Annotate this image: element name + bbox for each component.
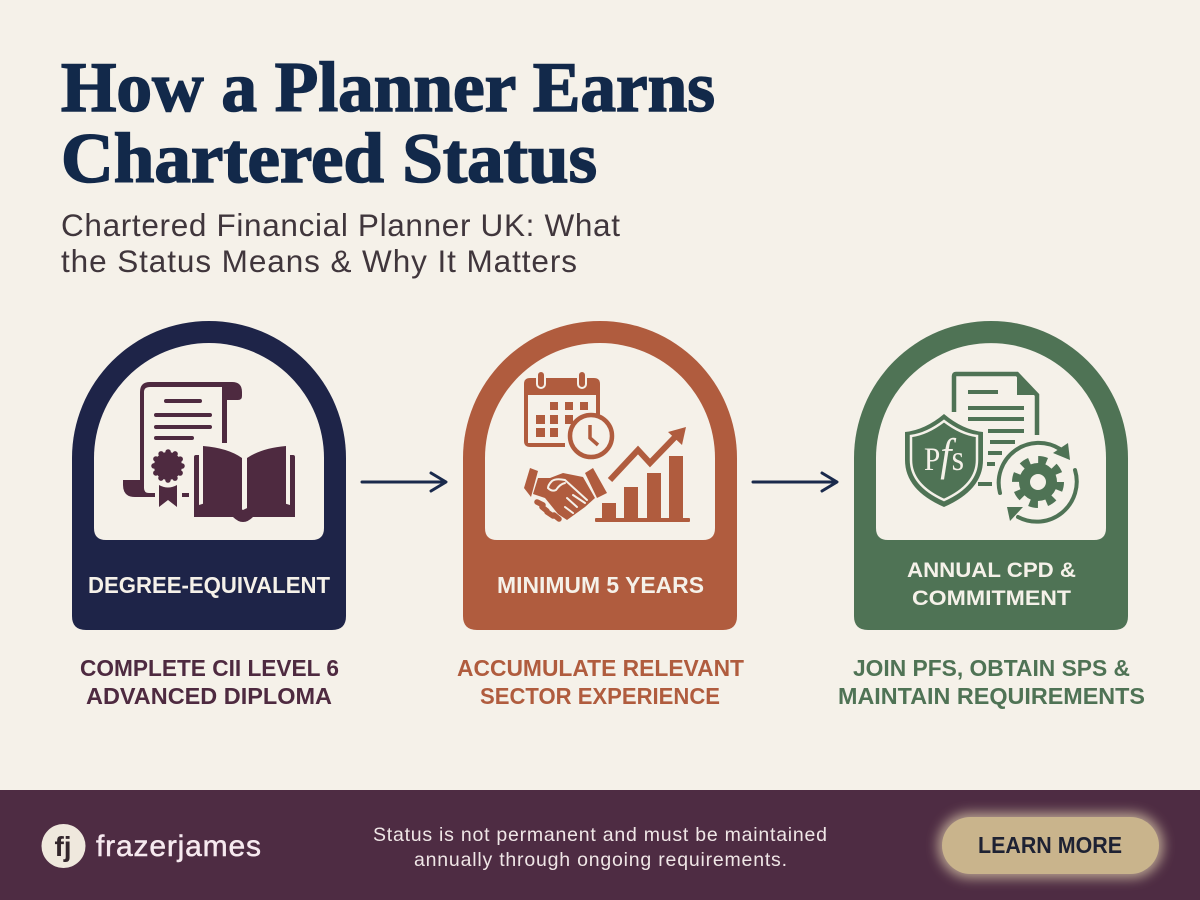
arch badge navy <box>72 321 346 630</box>
caption: step 1 <box>80 655 339 709</box>
caption: step 1: ADVANCED DIPLOMA <box>86 683 332 709</box>
arrow: step 1 to step 2 <box>362 473 446 491</box>
arch window <box>94 343 324 540</box>
footer note <box>373 824 827 871</box>
logo badge <box>42 824 86 868</box>
subtitle: the Status Means & Why It Matters <box>61 243 577 279</box>
badge label: COMMITMENT <box>912 586 1071 610</box>
arch badge green <box>854 321 1128 630</box>
logo monogram: fj <box>54 831 72 862</box>
subtitle: Chartered Financial Planner UK: What <box>61 207 620 243</box>
icon: PFS shield, document and renewal gear <box>905 374 1077 522</box>
caption: step 2 <box>457 655 744 709</box>
icon: PFS shield, document and renewal gear: Pfs <box>924 429 964 480</box>
badge label <box>907 558 1076 610</box>
footer note: Status is not permanent and must be maintained <box>373 824 827 846</box>
logo <box>42 824 261 868</box>
button: learn more <box>938 813 1163 878</box>
panel: step 2 minimum 5 years <box>463 321 737 630</box>
logo wordmark: frazerjames <box>96 830 261 863</box>
caption: step 3 <box>838 655 1145 709</box>
title <box>61 49 715 198</box>
button: learn more: LEARN MORE <box>978 832 1122 858</box>
arch window <box>876 343 1106 540</box>
panel: step 1 degree-equivalent <box>72 321 346 630</box>
caption: step 2: SECTOR EXPERIENCE <box>480 683 720 709</box>
badge label: MINIMUM 5 YEARS <box>497 572 704 598</box>
footer band <box>0 790 1200 900</box>
arch badge terracotta <box>463 321 737 630</box>
icon: scroll certificate and open book <box>123 382 295 522</box>
caption: step 3: JOIN PFS, OBTAIN SPS & <box>853 655 1130 681</box>
subtitle <box>61 207 620 279</box>
caption: step 3: MAINTAIN REQUIREMENTS <box>838 683 1145 709</box>
panel: step 3 annual CPD and commitment <box>854 321 1128 630</box>
title: Chartered Status <box>61 120 597 198</box>
arrow: step 2 to step 3 <box>753 473 837 491</box>
icon: calendar, clock, handshake and growth chart <box>524 371 690 522</box>
title: How a Planner Earns <box>61 49 715 127</box>
caption: step 1: COMPLETE CII LEVEL 6 <box>80 655 339 681</box>
arch window <box>485 343 715 540</box>
badge label: DEGREE-EQUIVALENT <box>88 572 330 598</box>
footer note: annually through ongoing requirements. <box>414 849 787 871</box>
badge label: ANNUAL CPD & <box>907 558 1076 582</box>
caption: step 2: ACCUMULATE RELEVANT <box>457 655 744 681</box>
